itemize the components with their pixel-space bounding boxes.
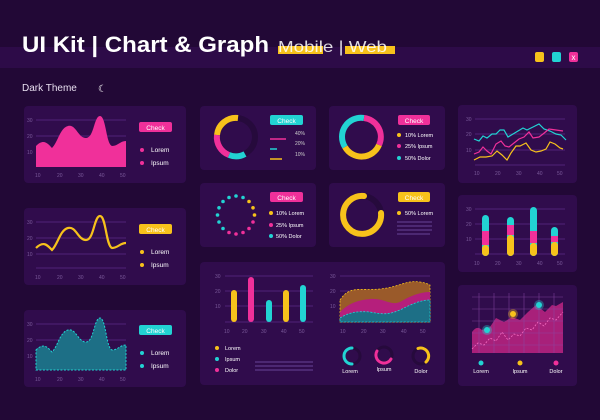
stacked area chart: 10 xyxy=(330,304,336,310)
legend: Lorem xyxy=(225,346,241,352)
panel: full donut: 25% Ipsum xyxy=(405,144,433,150)
bar chart: 20 xyxy=(215,289,221,295)
bar chart: 10 xyxy=(215,304,221,310)
panel: yellow line chart: Lorem xyxy=(151,249,169,256)
panel: teal area chart: 40 xyxy=(99,377,105,383)
stacked area chart: 50 xyxy=(420,329,426,335)
panel: stacked bar chart: 20 xyxy=(495,261,501,267)
small donuts: Dolor xyxy=(414,369,428,375)
stacked area chart: 10 xyxy=(340,329,346,335)
panel: stacked bar chart: 10 xyxy=(474,261,480,267)
panel: yellow line chart: 20 xyxy=(57,275,63,281)
panel: teal area chart: 30 xyxy=(78,377,84,383)
panel: multi line chart: 10 xyxy=(466,148,472,154)
panel: multi line chart: 10 xyxy=(474,171,480,177)
bar chart xyxy=(215,274,313,335)
title xyxy=(22,32,395,57)
panel: teal area chart: 10 xyxy=(27,354,33,360)
legend: Dolor xyxy=(225,368,238,374)
panel: bar and stacked area charts xyxy=(200,262,445,385)
panel: multi line chart: 40 xyxy=(537,171,543,177)
panel: grid area chart with markers: Dolor xyxy=(549,369,563,375)
panel: dotted ring: 50% Dolor xyxy=(276,234,302,240)
panel: grid area chart with markers: Lorem xyxy=(473,369,489,375)
panel: teal area chart: Lorem xyxy=(151,350,169,357)
panel: teal area chart xyxy=(24,310,186,387)
panel: yellow line chart xyxy=(24,208,186,285)
panel: multi line chart: 30 xyxy=(516,171,522,177)
panel: pink area chart: 40 xyxy=(99,173,105,179)
panel: yellow line chart: 40 xyxy=(99,275,105,281)
panel: pink area chart: 50 xyxy=(120,173,126,179)
legend xyxy=(215,346,241,374)
panel: partial donut with bars: 40% xyxy=(295,131,306,137)
stacked area chart: 30 xyxy=(330,274,336,280)
panel: multi line chart xyxy=(458,105,577,183)
small donuts: Ipsum xyxy=(377,367,392,373)
panel: yellow line chart: 20 xyxy=(27,236,33,242)
bar chart: 30 xyxy=(215,274,221,280)
bar chart: 50 xyxy=(299,329,305,335)
panel: pink area chart: 10 xyxy=(27,150,33,156)
panel: yellow line chart: 30 xyxy=(78,275,84,281)
panel: stacked bar chart: 40 xyxy=(537,261,543,267)
legend: Ipsum xyxy=(225,357,240,363)
panel: stacked bar chart: 10 xyxy=(466,237,472,243)
panel: partial donut with bars xyxy=(200,106,316,170)
panel: dotted ring: Check xyxy=(277,195,296,202)
panel: partial donut with bars: 10% xyxy=(295,152,306,158)
stacked area chart xyxy=(330,274,430,335)
panel: pink area chart: 20 xyxy=(57,173,63,179)
panel: yellow donut: 50% Lorem xyxy=(405,211,434,217)
bar chart: 10 xyxy=(224,329,230,335)
panel: teal area chart: 30 xyxy=(27,322,33,328)
small donuts: Lorem xyxy=(342,369,358,375)
panel: yellow donut: Check xyxy=(405,195,424,202)
stacked area chart: 20 xyxy=(330,289,336,295)
subtitle: dark theme xyxy=(22,83,107,95)
panel: full donut: 50% Dolor xyxy=(405,156,431,162)
title: UI Kit | Chart & Graph xyxy=(22,32,269,57)
panel: yellow line chart: Check xyxy=(146,227,165,234)
panel: stacked bar chart: 30 xyxy=(516,261,522,267)
stacked area chart: 30 xyxy=(380,329,386,335)
panel: dotted ring: 25% Ipsum xyxy=(276,223,304,229)
panel: partial donut with bars: Check xyxy=(277,118,296,125)
panel: grid area chart with markers xyxy=(458,285,577,386)
panel: yellow line chart: 50 xyxy=(120,275,126,281)
panel: pink area chart: Check xyxy=(146,125,165,132)
panel: stacked bar chart: 50 xyxy=(557,261,563,267)
panel: stacked bar chart xyxy=(458,195,577,272)
panel: teal area chart: 10 xyxy=(35,377,41,383)
panel: full donut: 10% Lorem xyxy=(405,133,434,139)
panel: teal area chart: 20 xyxy=(57,377,63,383)
panel: dotted ring: 10% Lorem xyxy=(276,211,305,217)
subtitle: dark theme: Dark Theme xyxy=(22,83,77,94)
panel: pink area chart: 20 xyxy=(27,134,33,140)
panel: teal area chart: Ipsum xyxy=(151,363,169,370)
panel: multi line chart: 20 xyxy=(495,171,501,177)
panel: pink area chart: Ipsum xyxy=(151,160,169,167)
panel: pink area chart: 30 xyxy=(27,118,33,124)
subtitle: dark theme: ☾ xyxy=(98,84,107,95)
icons: window controls: x xyxy=(572,53,576,62)
panel: grid area chart with markers: Ipsum xyxy=(513,369,528,375)
bar chart: 20 xyxy=(242,329,248,335)
panel: yellow line chart: Ipsum xyxy=(151,262,169,269)
panel: partial donut with bars: 20% xyxy=(295,141,306,147)
bar chart: 40 xyxy=(281,329,287,335)
panel: yellow line chart: 30 xyxy=(27,220,33,226)
small donuts xyxy=(342,347,429,375)
stacked area chart: 20 xyxy=(361,329,367,335)
panel: full donut xyxy=(329,106,445,170)
icons: window controls xyxy=(535,52,578,62)
stacked area chart: 40 xyxy=(401,329,407,335)
panel: yellow donut xyxy=(329,183,445,247)
panel: pink area chart xyxy=(24,106,186,183)
panel: multi line chart: 20 xyxy=(466,132,472,138)
panel: pink area chart: 30 xyxy=(78,173,84,179)
panel: multi line chart: 50 xyxy=(557,171,563,177)
panel: pink area chart: Lorem xyxy=(151,147,169,154)
panel: multi line chart: 30 xyxy=(466,117,472,123)
panel: pink area chart: 10 xyxy=(35,173,41,179)
panel: stacked bar chart: 20 xyxy=(466,222,472,228)
title: Mobile | Web xyxy=(278,39,387,56)
bar chart: 30 xyxy=(261,329,267,335)
panel: yellow line chart: 10 xyxy=(35,275,41,281)
panel: full donut: Check xyxy=(405,118,424,125)
panel: teal area chart: 50 xyxy=(120,377,126,383)
panel: teal area chart: 20 xyxy=(27,338,33,344)
panel: yellow line chart: 10 xyxy=(27,252,33,258)
panel: teal area chart: Check xyxy=(146,328,165,335)
panel: stacked bar chart: 30 xyxy=(466,207,472,213)
panel: dotted ring xyxy=(200,183,316,247)
